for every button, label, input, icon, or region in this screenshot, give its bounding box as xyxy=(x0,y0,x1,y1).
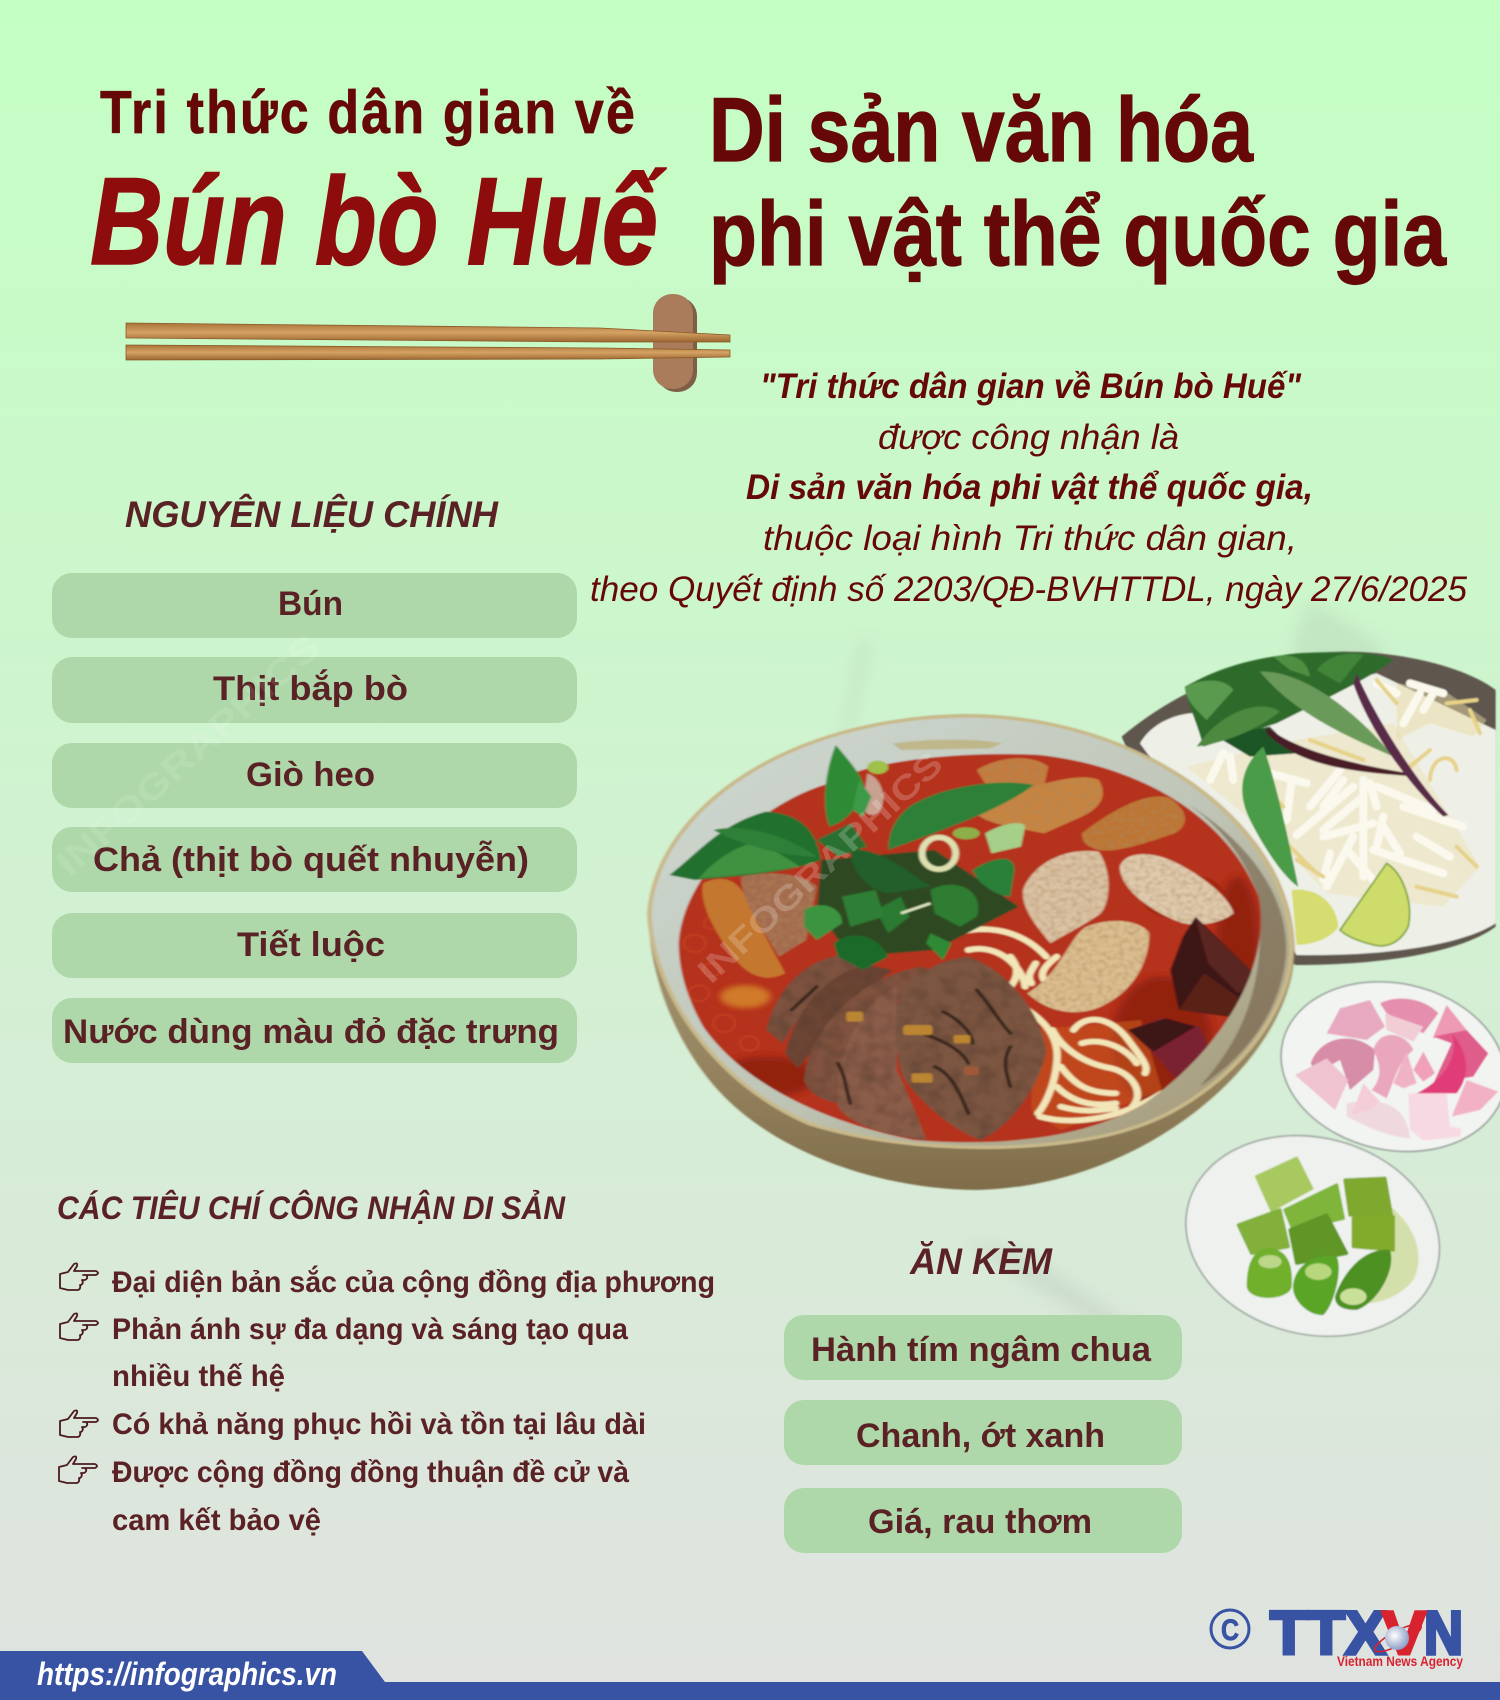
logo: copyright and TTXVN: V xyxy=(1382,1599,1426,1667)
beef slices xyxy=(766,955,1046,1140)
illustration: dish of sliced green chili xyxy=(1164,1110,1461,1362)
fatty beef piece xyxy=(702,879,785,978)
quote text block: Di sản văn hóa phi vật thể quốc gia, xyxy=(746,468,1313,507)
quote text block: "Tri thức dân gian về Bún bò Huế" xyxy=(760,367,1301,406)
criterion 4 xyxy=(59,1456,629,1537)
heading: main ingredients: NGUYÊN LIỆU CHÍNH xyxy=(125,493,499,535)
icon: chopsticks on rest xyxy=(126,294,730,392)
pill: Giò heo: Giò heo xyxy=(246,756,375,794)
heading: served with: ĂN KÈM xyxy=(909,1241,1053,1282)
illustration: bowl of bún bò Huế xyxy=(648,714,1295,1190)
pill: Giò heo xyxy=(52,743,577,808)
soup xyxy=(679,754,1261,1142)
panel: main ingredients list xyxy=(52,573,577,1063)
pill: Bún: Bún xyxy=(278,585,343,623)
logo: copyright and TTXVN: N xyxy=(1424,1599,1463,1667)
panel: served with list xyxy=(784,1315,1182,1553)
ink wash decorations xyxy=(838,600,1390,1340)
quote text block: thuộc loại hình Tri thức dân gian, xyxy=(763,519,1297,558)
pill: Chả xyxy=(52,827,577,892)
pill: Hành tím ngâm chua: Hành tím ngâm chua xyxy=(811,1331,1152,1369)
icon: pointing hand xyxy=(60,1263,98,1290)
pill: Giá, rau thơm: Giá, rau thơm xyxy=(868,1503,1092,1541)
fried patty slices xyxy=(977,758,1185,851)
pill: Thịt bắp bò xyxy=(52,657,577,723)
pill: Giá, rau thơm xyxy=(784,1488,1182,1553)
title line: Di sản văn hóa: Di sản văn hóa xyxy=(709,80,1254,181)
pill: Chanh, ớt xanh: Chanh, ớt xanh xyxy=(856,1417,1105,1455)
quote text block xyxy=(590,367,1468,609)
quote text block: theo Quyết định số 2203/QĐ-BVHTTDL, ngày 27/6/2025 xyxy=(590,570,1468,609)
quote text block: được công nhận là xyxy=(878,418,1179,457)
heading: heritage criteria: CÁC TIÊU CHÍ CÔNG NHẬN DI SẢN xyxy=(57,1190,566,1226)
criterion 4: cam kết bảo vệ xyxy=(112,1504,321,1537)
pill: Chanh, ớt xanh xyxy=(784,1400,1182,1465)
icon: pointing hand xyxy=(59,1456,97,1483)
pill: Bún xyxy=(52,573,577,638)
garnish: scallions and chili rings xyxy=(985,823,1025,853)
icon: pointing hand xyxy=(60,1313,98,1340)
basil leaves and cilantro xyxy=(669,745,1034,970)
pill: Tiết luộc xyxy=(52,913,577,978)
icon: pointing hand xyxy=(60,1410,98,1437)
footer bar xyxy=(0,1651,1500,1700)
chả patties xyxy=(1023,851,1233,1012)
watermark: over bowl: INFOGRAPHICS xyxy=(691,745,950,991)
title: left block xyxy=(90,79,667,291)
herbs xyxy=(1185,652,1393,747)
blood cubes xyxy=(1169,916,1248,1018)
panel: heritage criteria list xyxy=(59,1263,715,1537)
garnish: pork bit xyxy=(863,773,883,815)
logo: copyright and TTXVN xyxy=(1211,1599,1463,1669)
pill: Nước dùng: Nước dùng màu đỏ đặc trưng xyxy=(63,1013,559,1051)
title line: Bún bò Huế: Bún bò Huế xyxy=(90,153,667,291)
lime wedges xyxy=(1292,890,1338,945)
pill: Tiết luộc: Tiết luộc xyxy=(237,926,385,964)
criterion 2: Phản ánh sự đa dạng và sáng tạo qua xyxy=(112,1313,628,1346)
logo: copyright and TTXVN: C xyxy=(1221,1614,1239,1647)
illustration: side plate with bean sprouts, herbs and lime xyxy=(1122,652,1496,965)
pill: Thịt bắp bò: Thịt bắp bò xyxy=(213,670,408,708)
pill: Hành tím ngâm chua xyxy=(784,1315,1182,1380)
criterion 2 xyxy=(60,1313,628,1393)
footer url: https://infographics.vn xyxy=(37,1656,337,1692)
title line: Tri thức dân gian về: Tri thức dân gian về xyxy=(100,79,637,146)
logo: copyright and TTXVN: Vietnam News Agency xyxy=(1337,1654,1463,1669)
noodle back layer xyxy=(1031,1020,1162,1130)
criterion 3: Có khả năng phục hồi và tồn tại lâu dài xyxy=(112,1408,646,1441)
criterion 2: nhiều thế hệ xyxy=(112,1360,285,1393)
illustration: dish of pickled shallots xyxy=(1265,962,1500,1172)
criterion 4: Được cộng đồng đồng thuận đề cử và xyxy=(112,1456,629,1489)
watermark: left panel: INFOGRAPHICS xyxy=(48,626,328,884)
criterion 1: Đại diện bản sắc của cộng đồng địa phương xyxy=(112,1265,715,1299)
logo: copyright and TTXVN: TTX xyxy=(1270,1599,1386,1667)
darker centre under garnish xyxy=(817,850,1019,957)
pill: Chả: Chả (thịt bò quết nhuyễn) xyxy=(93,841,529,879)
pill: Nước dùng xyxy=(52,998,577,1063)
title: right block xyxy=(709,80,1447,285)
